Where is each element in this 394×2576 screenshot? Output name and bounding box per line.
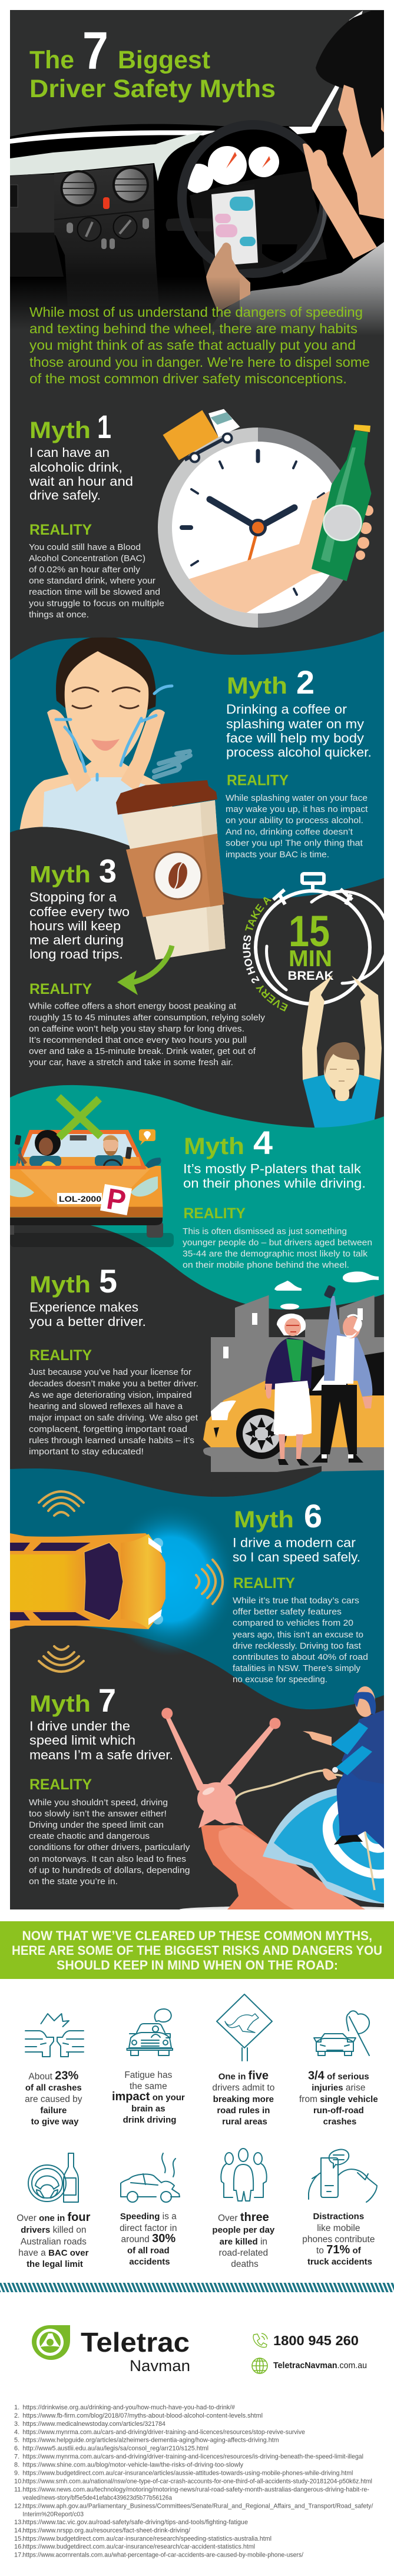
panel: dark main background bbox=[10, 10, 384, 1909]
heading: myth 7 bbox=[29, 1682, 116, 1719]
text block: myth 2 statement: Drinking a coffee or bbox=[226, 702, 347, 717]
text: stat copy: around 30% bbox=[121, 2232, 176, 2245]
text block: myth 3 reality: roughly 15 to 45 minutes after consumption, relying solely bbox=[29, 1013, 266, 1023]
text block: myth 7 statement: speed limit which bbox=[29, 1733, 135, 1748]
text block: introduction: While most of us understand the dangers of speeding bbox=[29, 304, 363, 320]
icon: P plate: P bbox=[104, 1182, 128, 1218]
text block: myth 3 statement bbox=[29, 890, 130, 962]
illustration: coffee cup with steam bbox=[116, 751, 226, 960]
references list: http://www5.austlii.edu.au/au/legis/sa/consol_reg/arr210/s125.html bbox=[22, 2445, 208, 2452]
banner: risks and dangers heading bbox=[0, 1921, 394, 1979]
text block: myth 6 reality: no excuse for speeding. bbox=[233, 1675, 327, 1685]
text block: myth 4 reality: This is often dismissed as just something bbox=[183, 1226, 347, 1236]
snail head and tentacles bbox=[161, 1708, 280, 1828]
text block: myth 7 statement: I drive under the bbox=[29, 1719, 130, 1733]
icon: kangaroo road sign bbox=[217, 1994, 272, 2061]
references list: 7. bbox=[14, 2453, 19, 2460]
logo: Teletrac Navman: Navman bbox=[130, 2357, 190, 2375]
text: stat copy: direct factor in bbox=[120, 2223, 177, 2233]
text block: myth 7 reality: of up to hundreds of dollars, depending bbox=[29, 1865, 190, 1875]
icon: driver in car with sleep bubble bbox=[127, 2009, 173, 2056]
text block: myth 3 statement: coffee every two bbox=[29, 904, 130, 919]
rope bbox=[235, 1771, 375, 1890]
text: stat copy: truck accidents bbox=[307, 2257, 372, 2267]
text block: introduction: those around you in danger. We’re here to dispel some bbox=[29, 354, 370, 370]
illustration: man riding a snail bbox=[161, 1686, 394, 1913]
text block: myth 2 statement: process alcohol quicker. bbox=[226, 745, 372, 760]
references list: 1. bbox=[14, 2404, 19, 2411]
heading: title: The bbox=[29, 46, 74, 74]
text: 15 min break: MIN bbox=[289, 946, 332, 972]
icon: steering wheel bbox=[182, 125, 325, 273]
stat: single vehicle crashes bbox=[299, 2011, 380, 2127]
text block: myth 7 reality: While you shouldn’t speed, driving bbox=[29, 1798, 168, 1808]
icon: location pin bubble bbox=[139, 1129, 155, 1145]
references list: https://drinkwise.org.au/drinking-and-you/how-much-have-you-had-to-drink/# bbox=[22, 2404, 236, 2411]
icon: headlights bbox=[10, 1176, 158, 1197]
text block: myth 1 reality: you struggle to focus on multiple bbox=[29, 598, 164, 609]
text: stat copy: failure bbox=[40, 2106, 67, 2116]
man driver with phone bbox=[103, 1135, 132, 1167]
text: stat copy: of all crashes bbox=[25, 2083, 82, 2093]
heading: myth 3 bbox=[29, 853, 117, 889]
stat: distractions bbox=[302, 2150, 378, 2267]
text block: myth 1 reality: one standard drink, where your bbox=[29, 576, 155, 586]
arm bbox=[189, 499, 322, 613]
text block: myth 4 reality bbox=[183, 1205, 372, 1270]
rider bbox=[303, 1686, 384, 1849]
icon: phone with chat bubbles bbox=[206, 184, 260, 312]
text: stat copy: drivers admit to bbox=[212, 2083, 274, 2093]
heading: myth 5: 5 bbox=[99, 1262, 117, 1299]
references list: https://www.budgetdirect.com.au/car-insurance/research/car-accident-statistics.html bbox=[22, 2544, 255, 2551]
panel: myth 4 green wave bbox=[10, 1085, 384, 1309]
icon: hand holding phone on wheel bbox=[309, 2150, 377, 2202]
icon: instrument gauges bbox=[184, 146, 279, 193]
text block: introduction: of the most common driver safety misconceptions. bbox=[29, 371, 347, 386]
references list: 17. bbox=[14, 2552, 23, 2559]
stat: BAC over limit bbox=[16, 2153, 93, 2269]
snail shell bbox=[263, 1787, 384, 1904]
text block: myth 2 reality: impacts your BAC is time. bbox=[226, 850, 329, 860]
heading: myth 2: 2 bbox=[296, 664, 314, 701]
heading: myth 2: Myth bbox=[227, 673, 287, 699]
heading: myth 3: 3 bbox=[99, 853, 117, 889]
text block: myth 1 reality: REALITY bbox=[29, 522, 92, 538]
text block: myth 7 statement bbox=[29, 1719, 173, 1762]
heading: myth 1: 1 bbox=[97, 408, 111, 445]
text block: myth 4 statement: on their phones while driving. bbox=[183, 1176, 366, 1191]
heading: myth 3: Myth bbox=[29, 862, 91, 888]
text block: myth 1 statement: alcoholic drink, bbox=[29, 460, 122, 475]
logo: Teletrac Navman: Teletrac bbox=[81, 2327, 190, 2358]
text block: myth 7 reality: create chaotic and dangerous bbox=[29, 1831, 150, 1841]
text: 15 min break: 15 bbox=[289, 907, 330, 956]
references list: 5. bbox=[14, 2436, 19, 2444]
heading: myth 5 bbox=[29, 1262, 117, 1299]
icon: crashed smoking car bbox=[121, 2153, 180, 2202]
references list: https://www.smh.com.au/national/nsw/one-type-of-car-crash-accounts-for-one-third-of-all-accidents-study-20181204-p50k6z.html bbox=[22, 2478, 372, 2485]
references list: https://www.mynrma.com.au/cars-and-driving/driver-training-and-licences/resources/stop-revive-survive bbox=[22, 2429, 305, 2436]
heading: title: Driver Safety Myths bbox=[29, 75, 276, 103]
text block: myth 3 reality: While coffee offers a short energy boost peaking at bbox=[29, 1001, 237, 1012]
text: stat copy: drivers killed on bbox=[21, 2225, 86, 2235]
text: stat copy: Distractions bbox=[313, 2212, 364, 2222]
text block: myth 3 reality: over and take a 15-minute break. Drink water, get out of bbox=[29, 1046, 256, 1056]
heading: myth 1: Myth bbox=[29, 417, 91, 443]
text: stat copy: breaking more bbox=[213, 2094, 274, 2104]
text block: myth 6 reality: fatalities in NSW. There’s simply bbox=[233, 1663, 361, 1673]
references list: 9. bbox=[14, 2469, 19, 2476]
text: stat copy: brain as bbox=[131, 2104, 165, 2114]
woman bbox=[265, 1314, 327, 1466]
references list: https://www.nrspp.org.au/resources/fact-sheet-drink-driving/ bbox=[22, 2527, 191, 2534]
text: stat copy: injuries arise bbox=[312, 2083, 365, 2093]
heading: myth 7: 7 bbox=[98, 1682, 116, 1719]
text block: myth 6 reality: contributes to about 40% of road bbox=[233, 1652, 368, 1662]
references list bbox=[14, 2404, 373, 2559]
icon: dash knobs bbox=[67, 216, 149, 249]
icon: three people bbox=[221, 2149, 267, 2201]
text: stat copy: rural areas bbox=[222, 2117, 267, 2127]
text: stat copy: of all road bbox=[127, 2246, 170, 2256]
text block: myth 3 reality: on caffeine won’t help you stay sharp for long drives. bbox=[29, 1024, 244, 1034]
contact: website: TeletracNavman.com.au bbox=[273, 2360, 367, 2371]
contact: website bbox=[252, 2358, 367, 2373]
text: stat copy: One in five bbox=[218, 2069, 269, 2082]
text block: myth 5 reality: rules through learned unsafe habits – it’s bbox=[29, 1435, 194, 1446]
text block: myth 2 reality: may wake you up, it has no impact bbox=[226, 804, 368, 814]
text: stat copy: from single vehicle bbox=[299, 2094, 378, 2104]
text: stat copy: are killed in bbox=[220, 2237, 267, 2247]
icon: clouds bbox=[274, 1271, 379, 1309]
icon: car beside a tree bbox=[314, 2011, 369, 2056]
text block: myth 7 reality bbox=[29, 1776, 190, 1887]
illustration: person holding up a 15 minute break stopwatch bbox=[243, 872, 384, 1128]
text block: myth 7 reality: on motorways. It can also lead to fines bbox=[29, 1854, 186, 1864]
icon: car wheel bbox=[236, 1408, 287, 1459]
text block: myth 3 reality bbox=[29, 981, 266, 1067]
text block: myth 6 reality: offer better safety features bbox=[233, 1607, 342, 1617]
illustration: woman splashing water on her face bbox=[20, 637, 173, 846]
heading: myth 5: Myth bbox=[29, 1272, 91, 1298]
text: stat copy: the legal limit bbox=[27, 2259, 83, 2269]
text block: myth 1 statement: wait an hour and bbox=[29, 474, 133, 489]
heading: myth 1 bbox=[29, 408, 111, 445]
text block: introduction bbox=[29, 304, 370, 386]
text block: myth 6 statement: so I can speed safely. bbox=[233, 1550, 360, 1564]
text block: myth 6 reality: REALITY bbox=[233, 1575, 295, 1592]
text: stat copy: accidents bbox=[129, 2257, 170, 2267]
heading: myth 6: 6 bbox=[304, 1497, 322, 1534]
text block: myth 3 reality: your car, have a stretch and take in some fresh air. bbox=[29, 1057, 233, 1067]
X mark bbox=[58, 1097, 101, 1138]
references list: vealed/news-story/bf5e5de41efabc439623d5b77b56126a bbox=[22, 2494, 173, 2501]
text: stat copy: to 71% of bbox=[316, 2243, 361, 2256]
heading: myth 4: Myth bbox=[184, 1133, 244, 1159]
heading: myth 6: Myth bbox=[234, 1507, 294, 1533]
text block: myth 5 statement: Experience makes bbox=[29, 1300, 138, 1314]
text block: myth 6 reality bbox=[233, 1575, 368, 1685]
references list: https://www.helpguide.org/articles/alzheimers-dementia-aging/how-aging-affects-driving.htm bbox=[22, 2436, 279, 2444]
text: stat copy: Australian roads bbox=[21, 2237, 87, 2247]
text block: myth 3 reality: It’s recommended that once every two hours you pull bbox=[29, 1035, 247, 1045]
references list: 11. bbox=[14, 2486, 22, 2493]
text block: myth 6 reality: compared to vehicles from 20 bbox=[233, 1618, 353, 1628]
text: stat copy: Fatigue has bbox=[124, 2070, 173, 2080]
interior fade bbox=[10, 277, 240, 330]
text block: myth 5 reality: As we age deteriorating vision, impaired bbox=[29, 1390, 191, 1400]
text block: myth 7 reality: on the state you’re in. bbox=[29, 1877, 118, 1887]
text: stat copy: have a BAC over bbox=[18, 2248, 88, 2258]
stat: failure to give way bbox=[25, 2014, 85, 2127]
references list: Interim%20Report/c03 bbox=[22, 2511, 84, 2518]
text block: myth 5 reality: important to stay educated! bbox=[29, 1447, 144, 1457]
contact: phone: 1800 945 260 bbox=[273, 2333, 359, 2348]
stat: speeding bbox=[120, 2153, 180, 2267]
references list: 6. bbox=[14, 2445, 19, 2452]
references list: 8. bbox=[14, 2461, 19, 2468]
text block: myth 5 reality: major impact on safe driving. We also get bbox=[29, 1413, 198, 1423]
text: stat copy: Over three bbox=[218, 2211, 269, 2224]
icon: air vents bbox=[60, 167, 149, 207]
references list: https://www.budgetdirect.com.au/car-insurance/research/speeding-statistics-australia.html bbox=[22, 2535, 272, 2542]
references list: 10. bbox=[14, 2478, 23, 2485]
heading: title: 7 bbox=[82, 22, 108, 81]
text block: myth 3 reality: REALITY bbox=[29, 981, 92, 997]
text block: myth 2 reality: While splashing water on your face bbox=[226, 793, 367, 803]
icon: two cars crashing bbox=[25, 2014, 84, 2057]
references list: https://www.tac.vic.gov.au/road-safety/safe-driving/tips-and-tools/fighting-fatigue bbox=[22, 2519, 248, 2526]
text block: myth 6 statement: I drive a modern car bbox=[233, 1536, 356, 1550]
text block: myth 7 reality: too slowly isn’t the answer either! bbox=[29, 1809, 167, 1819]
text: stat copy: like mobile bbox=[317, 2223, 360, 2233]
text block: myth 1 reality: things at once. bbox=[29, 610, 89, 619]
text block: myth 1 reality bbox=[29, 522, 164, 619]
text block: myth 4 reality: REALITY bbox=[184, 1205, 246, 1222]
text block: myth 5 reality: REALITY bbox=[29, 1347, 92, 1364]
references list: https://www.fb-firm.com/blog/2018/07/myths-about-blood-alcohol-content-levels.shtml bbox=[22, 2412, 263, 2419]
illustration: modern car from above with sensor waves bbox=[10, 1491, 239, 1672]
references list: https://www.budgetdirect.com.au/car-insurance/articles/aussie-attitudes-towards-using-mobile-phones-while-driving.html bbox=[22, 2469, 353, 2476]
references list: https://www.news.com.au/technology/motoring/motoring-news/rural-road-safety-month-australias-dangerous-driving-habit-re- bbox=[22, 2486, 369, 2493]
icon: truck bbox=[163, 409, 240, 462]
text block: myth 7 reality: REALITY bbox=[29, 1776, 92, 1793]
heading: myth 4 bbox=[184, 1124, 273, 1161]
heading: myth 6 bbox=[234, 1497, 322, 1534]
heading: myth 7: Myth bbox=[29, 1691, 91, 1717]
icon: beer bottle bbox=[312, 425, 373, 581]
text: stat copy: drink driving bbox=[123, 2115, 176, 2125]
references list: 15. bbox=[14, 2535, 23, 2542]
text block: introduction: you might think of as safe that actually put you and bbox=[29, 337, 356, 353]
text block: myth 4 reality: on their mobile phone behind the wheel. bbox=[183, 1260, 349, 1270]
text block: myth 4 reality: 35-44 are the demographic most likely to talk bbox=[183, 1249, 368, 1259]
panel: myth 2 teal wave bbox=[10, 631, 384, 899]
heading: myth 2 bbox=[227, 664, 314, 701]
text block: myth 5 statement: you a better driver. bbox=[29, 1314, 146, 1329]
references list: https://www.acornrentals.com.au/what-percentage-of-car-accidents-are-caused-by-mobile-phone-users/ bbox=[22, 2552, 304, 2559]
text: stat copy: the same bbox=[130, 2081, 167, 2091]
woman passenger bbox=[15, 1130, 61, 1166]
illustration: orange car with P plate bbox=[10, 1097, 174, 1247]
references list: https://www.medicalnewstoday.com/articles/321784 bbox=[22, 2421, 165, 2428]
text block: myth 1 statement: I can have an bbox=[29, 445, 110, 460]
text block: myth 3 statement: Stopping for a bbox=[29, 890, 117, 904]
references list: 3. bbox=[14, 2421, 19, 2428]
car body bbox=[10, 1533, 165, 1629]
text: stat copy: deaths bbox=[231, 2259, 259, 2269]
text block: myth 5 reality: hearing and slowed reflexes all have a bbox=[29, 1401, 183, 1411]
icon: stopwatch bbox=[256, 874, 389, 1004]
text: stat copy: phones contribute bbox=[302, 2234, 375, 2245]
references list: 14. bbox=[14, 2527, 23, 2534]
text block: myth 2 statement: splashing water on my bbox=[226, 717, 365, 731]
stat: three deaths a day bbox=[212, 2149, 277, 2269]
text block: myth 4 statement bbox=[183, 1161, 366, 1191]
stat: fatigue bbox=[112, 2009, 187, 2125]
text block: myth 5 reality: complacent, forgetting important road bbox=[29, 1424, 187, 1434]
text block: myth 4 statement: It’s mostly P-platers that talk bbox=[183, 1161, 362, 1176]
panel: myth 6 blue wave bbox=[10, 1468, 384, 1709]
text: stat copy: impact on your bbox=[112, 2090, 185, 2103]
text: stat copy: run-off-road bbox=[313, 2106, 364, 2116]
logo: Teletrac Navman bbox=[32, 2325, 190, 2375]
text block: myth 2 reality: And no, drinking coffee doesn’t bbox=[226, 827, 353, 837]
man bbox=[312, 1285, 372, 1463]
text block: myth 2 reality: on your ability to process alcohol. bbox=[226, 815, 363, 825]
text block: myth 1 statement: drive safely. bbox=[29, 488, 101, 503]
references list: 16. bbox=[14, 2544, 23, 2551]
text block: myth 6 reality: While it’s true that today’s cars bbox=[233, 1596, 359, 1606]
text: 15 min break: BREAK bbox=[287, 969, 333, 983]
text block: myth 6 statement bbox=[233, 1536, 360, 1564]
references list: https://www.aph.gov.au/Parliamentary_Business/Committees/Senate/Rural_and_Regional_Affairs_and_Transport/Road_safety/ bbox=[22, 2502, 373, 2509]
text block: myth 1 reality: Alcohol Concentration (BAC) bbox=[29, 553, 145, 563]
references list: 13. bbox=[14, 2519, 23, 2526]
text: stat copy: are caused by bbox=[25, 2094, 82, 2104]
references list: 12. bbox=[14, 2502, 23, 2509]
text block: myth 7 reality: conditions for other drivers, particularly bbox=[29, 1842, 190, 1852]
text: stat copy: to give way bbox=[31, 2117, 79, 2127]
icon: driver head and arm bbox=[206, 11, 384, 336]
text block: myth 6 reality: drive recklessly. Driving too fast bbox=[233, 1641, 362, 1651]
text: stat copy: road rules in bbox=[217, 2106, 270, 2116]
buildings bbox=[211, 1295, 384, 1472]
divider band bbox=[0, 2283, 394, 2292]
text: number plate: LOL-2000 bbox=[59, 1194, 101, 1204]
text: stat copy: Speeding is a bbox=[120, 2212, 177, 2222]
icon: sensor waves bbox=[39, 1491, 223, 1672]
text block: myth 2 reality: sober you up! The only thing that bbox=[226, 838, 363, 848]
text block: myth 7 reality: Driving under the speed limit can bbox=[29, 1820, 164, 1830]
text block: myth 1 reality: of 0.02% an hour after only bbox=[29, 565, 141, 575]
text block: myth 2 statement: face will help my body bbox=[226, 731, 365, 745]
text block: myth 5 reality: Just because you’ve had your license for bbox=[29, 1367, 191, 1377]
illustration: driver texting at the wheel bbox=[10, 11, 384, 336]
text block: myth 5 reality: decades doesn’t make you a better driver. bbox=[29, 1379, 198, 1388]
text block: myth 5 reality bbox=[29, 1347, 198, 1457]
text block: myth 3 statement: me alert during bbox=[29, 933, 124, 947]
illustration: older couple with car and city bbox=[203, 1271, 384, 1472]
references list: 2. bbox=[14, 2412, 19, 2419]
text block: myth 1 reality: You could still have a Blood bbox=[29, 542, 141, 552]
text block: myth 3 statement: hours will keep bbox=[29, 919, 121, 933]
snail body bbox=[201, 1825, 365, 1909]
text block: introduction: and texting behind the wheel, there are many habits bbox=[29, 321, 357, 336]
banner: risks and dangers heading: SHOULD KEEP IN MIND WHEN ON THE ROAD: bbox=[57, 1958, 338, 1972]
text: stat copy: Over one in four bbox=[16, 2211, 90, 2224]
text block: myth 6 reality: years ago, this isn’t an excuse to bbox=[233, 1630, 363, 1640]
text block: myth 2 reality bbox=[226, 773, 368, 860]
heading: title: Biggest bbox=[118, 46, 210, 74]
stat: rural road rules bbox=[212, 1994, 277, 2127]
arrow: coffee to reality bbox=[117, 946, 172, 995]
references list: https://www.shine.com.au/blog/motor-vehicle-law/the-risks-of-driving-too-slowly bbox=[22, 2461, 243, 2468]
text block: myth 2 statement bbox=[226, 702, 372, 760]
heading: title bbox=[29, 22, 276, 103]
text: 15 min break bbox=[287, 907, 333, 983]
text: stat copy: crashes bbox=[323, 2117, 356, 2127]
text block: myth 5 statement bbox=[29, 1300, 146, 1329]
text: stat copy: road-related bbox=[219, 2248, 268, 2258]
text: stat copy: About 23% bbox=[28, 2069, 78, 2082]
heading: myth 4: 4 bbox=[253, 1124, 273, 1161]
text block: myth 1 statement bbox=[29, 445, 133, 503]
text block: myth 4 reality: younger people do – but drivers aged between bbox=[183, 1238, 372, 1248]
references list: https://www.mynrma.com.au/cars-and-driving/driver-training-and-licences/resources/is-driving-beneath-the-speed-limit-illegal bbox=[22, 2453, 363, 2460]
illustration: clock, truck and beer bottle bbox=[158, 409, 373, 628]
text: stat copy: people per day bbox=[212, 2225, 275, 2235]
text block: myth 1 reality: reaction time will be slowed and bbox=[29, 587, 160, 597]
text block: myth 7 statement: means I’m a safe driver. bbox=[29, 1748, 173, 1762]
icon: steering wheel and wine bottle bbox=[28, 2153, 78, 2202]
text block: myth 2 reality: REALITY bbox=[227, 773, 289, 789]
text: stat copy: 3/4 of serious bbox=[308, 2069, 369, 2082]
banner: risks and dangers heading: NOW THAT WE’VE CLEARED UP THESE COMMON MYTHS, bbox=[22, 1928, 372, 1943]
text block: myth 3 statement: long road trips. bbox=[29, 947, 123, 962]
text: curved caption: EVERY 2 HOURS TAKE A bbox=[243, 897, 288, 1012]
references list: 4. bbox=[14, 2429, 19, 2436]
